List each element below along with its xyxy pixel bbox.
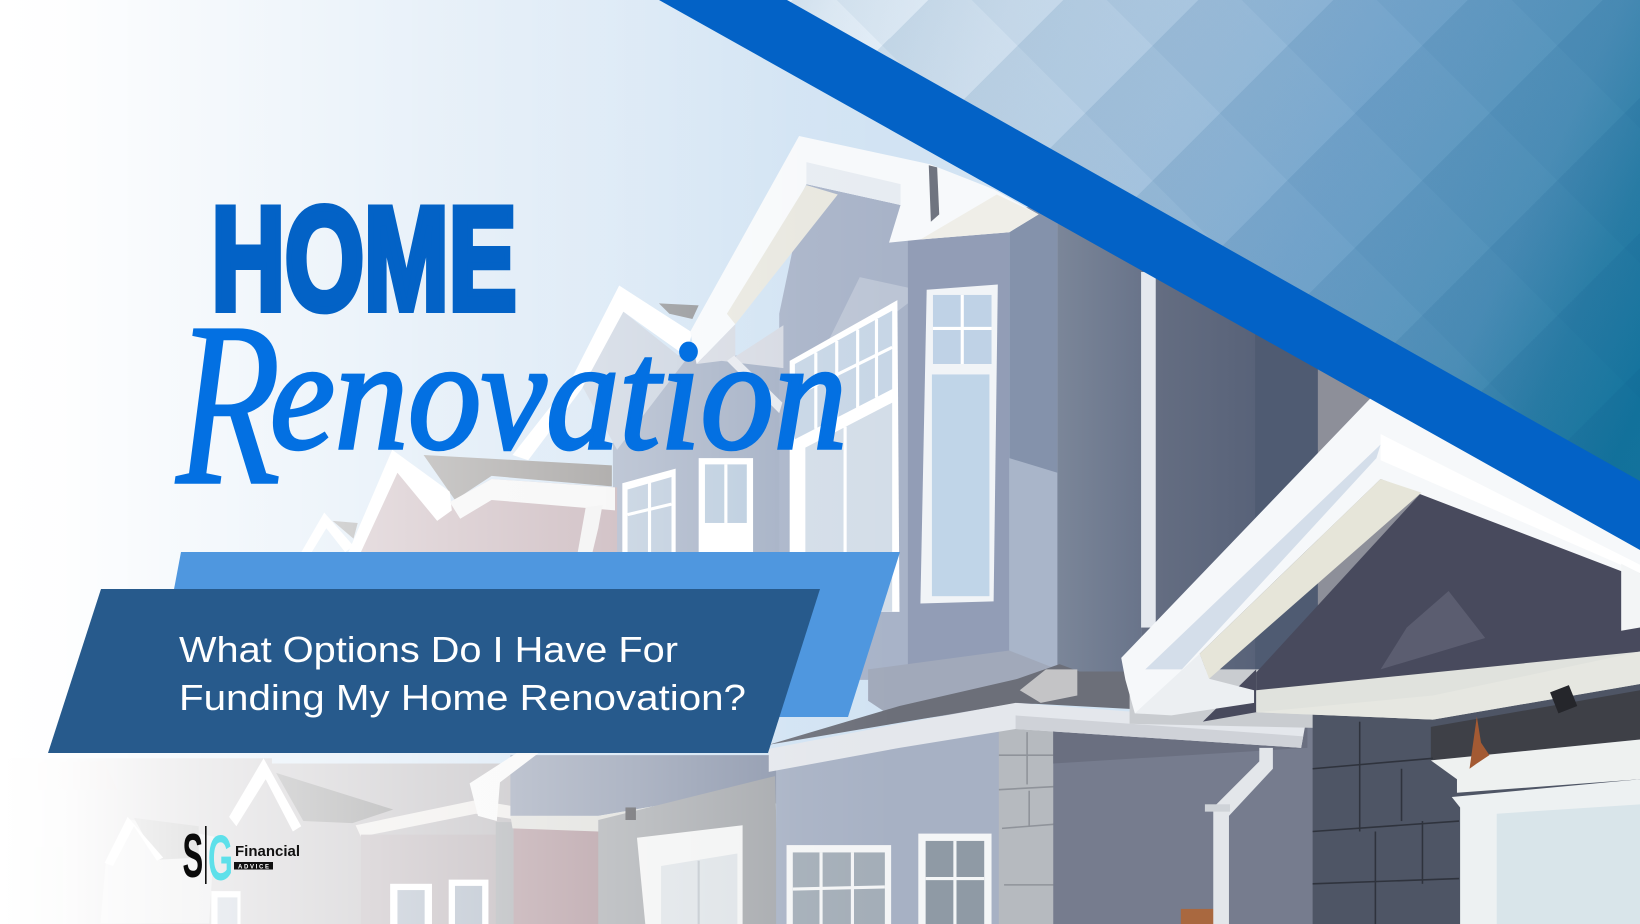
logo: SG Financial Advice: ADVICE [238, 864, 269, 870]
logo: SG Financial Advice: G [208, 822, 233, 894]
porch gable right [1121, 397, 1640, 722]
title: Renovation script: R [175, 274, 281, 534]
third house behind [301, 450, 617, 554]
lower centre gable and stone [470, 753, 779, 924]
downspout upper [1141, 272, 1156, 628]
downspout lower [1205, 748, 1273, 924]
banner back: light blue [150, 552, 900, 717]
lower roof and gutter [769, 664, 1305, 772]
title: Renovation script [175, 274, 847, 534]
tall window [920, 284, 998, 603]
bay window [790, 300, 899, 612]
far-left pale houses [0, 758, 272, 924]
lower stone pier and garage [1130, 669, 1640, 924]
main house walls [779, 184, 1422, 701]
second house behind [513, 286, 785, 565]
banner front: dark blue [48, 589, 820, 753]
corner diamond pattern panel [787, 0, 1640, 482]
banner text: Funding My Home Renovation? [179, 677, 746, 718]
title: Renovation script: enovation [270, 308, 847, 483]
lower walls [776, 651, 1315, 924]
banner text [179, 629, 746, 718]
banner text: What Options Do I Have For [179, 629, 678, 670]
diagonal blue band [659, 0, 1640, 550]
title: HOME: HOME [212, 177, 516, 340]
lower windows [787, 834, 992, 924]
white fade overlay [0, 0, 940, 924]
logo: SG Financial Advice: S [182, 823, 203, 891]
logo: SG Financial Advice: Financial [235, 843, 300, 860]
main roof trim and soffit [690, 136, 1039, 413]
logo: SG Financial Advice [182, 822, 300, 894]
third row gable below banner [229, 758, 599, 924]
